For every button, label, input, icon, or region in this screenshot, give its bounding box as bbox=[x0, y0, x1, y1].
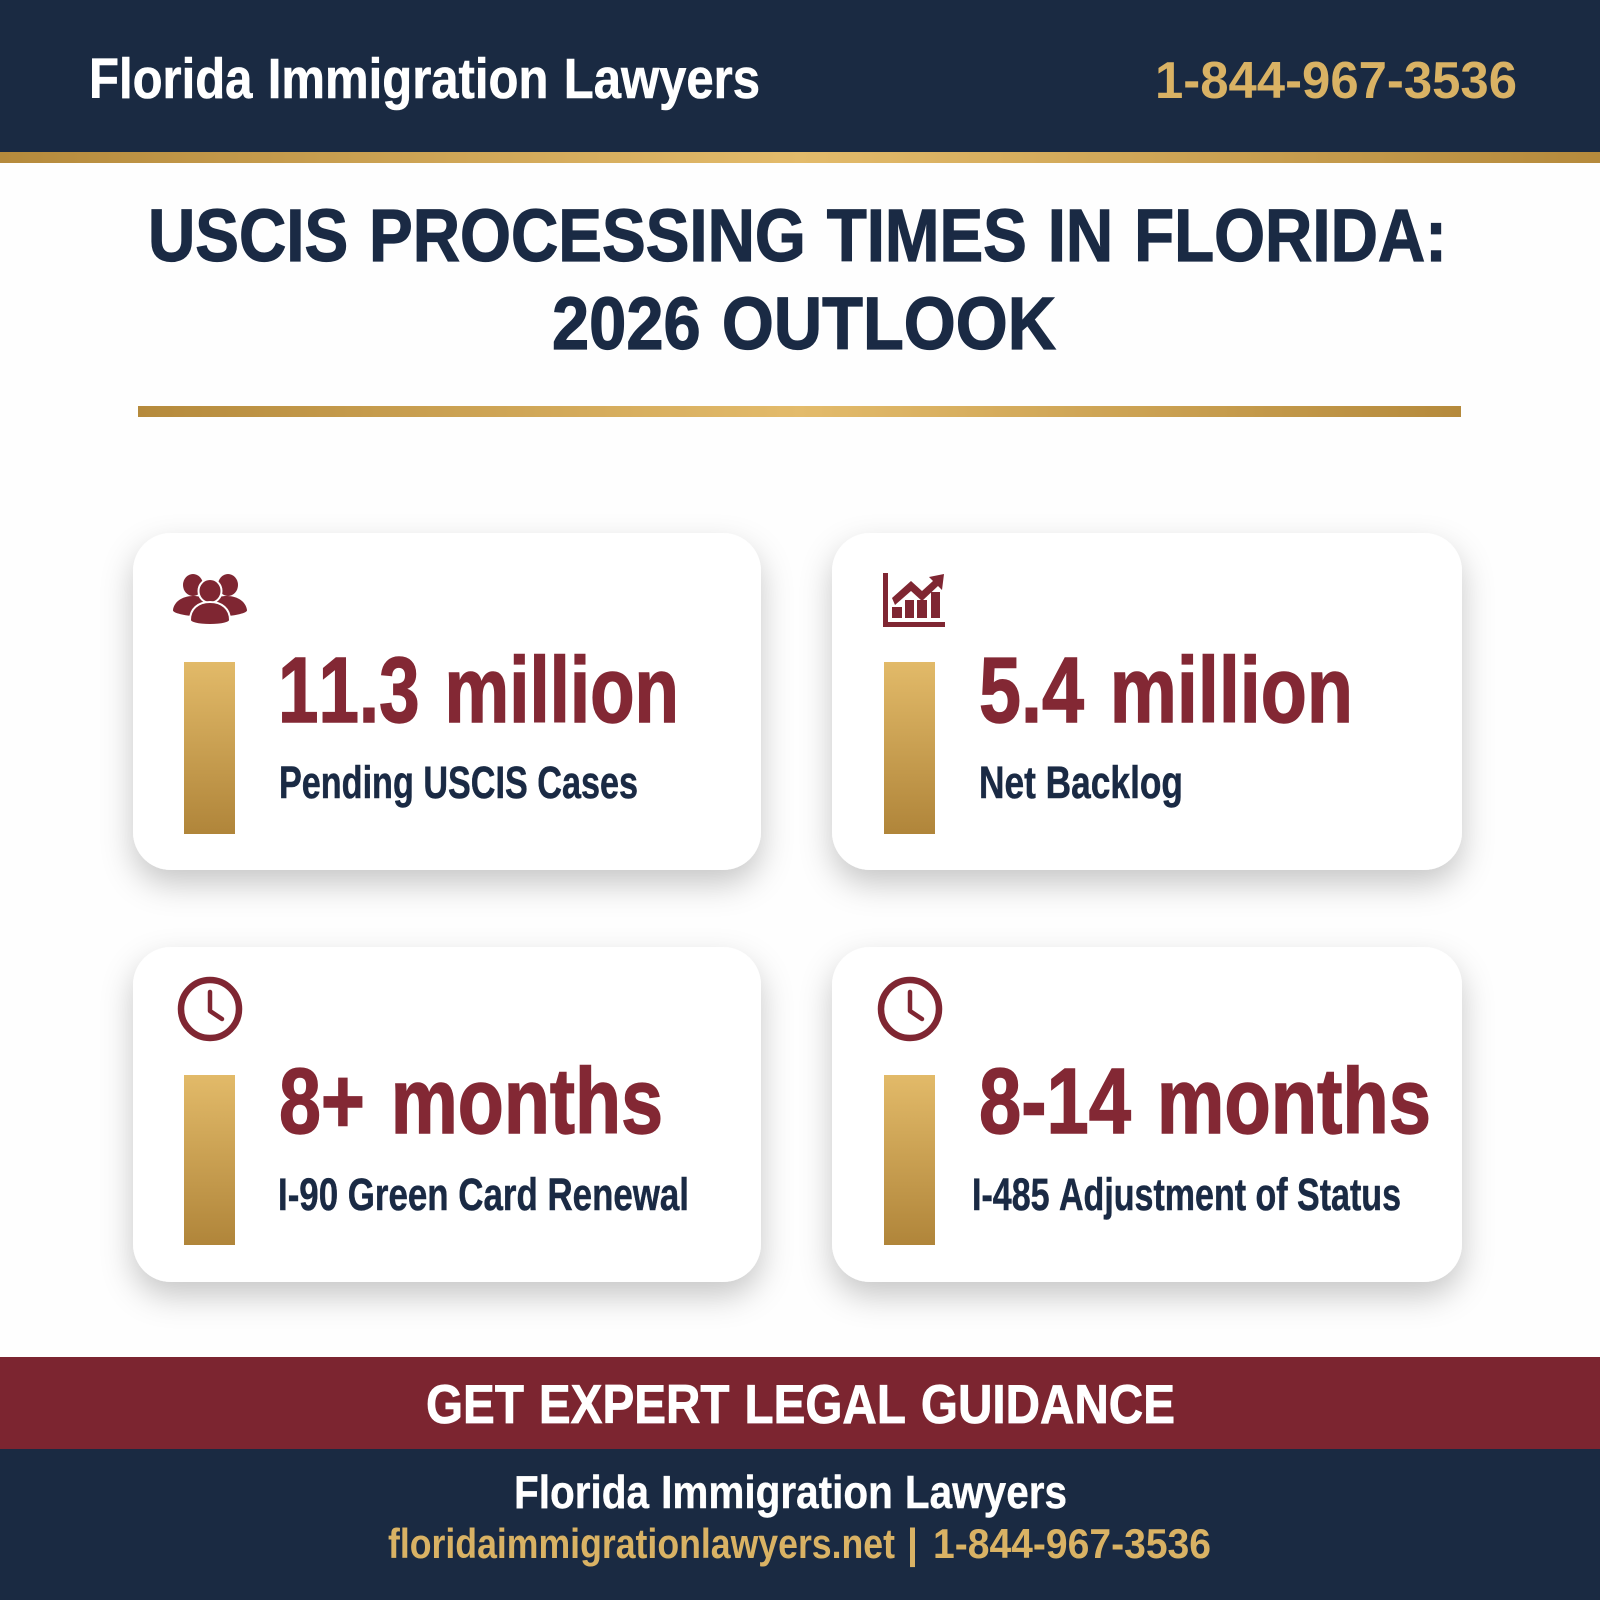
footer band bbox=[0, 1449, 1600, 1600]
stat label: Net Backlog bbox=[979, 757, 1183, 808]
gold bar bbox=[884, 662, 935, 834]
stat label: Pending USCIS Cases bbox=[279, 757, 638, 808]
call to action text: GET EXPERT LEGAL GUIDANCE bbox=[426, 1373, 1175, 1435]
stat label: I-90 Green Card Renewal bbox=[278, 1169, 689, 1220]
icon: people bbox=[173, 574, 247, 625]
footer website and phone: | bbox=[907, 1520, 918, 1568]
title gold divider bbox=[138, 406, 1461, 417]
footer website and phone: floridaimmigrationlawyers.net bbox=[388, 1520, 895, 1567]
panel: I-90 renewal bbox=[133, 947, 761, 1282]
panel: I-485 adjustment bbox=[832, 947, 1462, 1282]
stat value: 5.4 million bbox=[979, 638, 1353, 742]
header band bbox=[0, 0, 1600, 152]
icon: clock bbox=[881, 980, 939, 1038]
title bbox=[148, 194, 1447, 365]
icon: clock bbox=[181, 980, 239, 1038]
gold bar bbox=[884, 1075, 935, 1245]
header firm name: Florida Immigration Lawyers bbox=[89, 47, 760, 111]
title: USCIS PROCESSING TIMES IN FLORIDA: bbox=[148, 194, 1447, 277]
header phone number: 1-844-967-3536 bbox=[1155, 52, 1517, 110]
call to action band bbox=[0, 1357, 1600, 1449]
stat value: 8-14 months bbox=[979, 1049, 1431, 1153]
panel: net backlog bbox=[832, 533, 1462, 870]
header gold rule bbox=[0, 152, 1600, 163]
gold bar bbox=[184, 662, 235, 834]
stat label: I-485 Adjustment of Status bbox=[972, 1169, 1401, 1220]
gold bar bbox=[184, 1075, 235, 1245]
stat value: 8+ months bbox=[279, 1049, 663, 1153]
icon: rising bar chart bbox=[883, 573, 945, 627]
footer website and phone: 1-844-967-3536 bbox=[933, 1520, 1211, 1567]
footer firm name: Florida Immigration Lawyers bbox=[514, 1466, 1067, 1518]
title: 2026 OUTLOOK bbox=[552, 282, 1056, 365]
panel: pending USCIS cases bbox=[133, 533, 761, 870]
stat value: 11.3 million bbox=[278, 638, 679, 742]
